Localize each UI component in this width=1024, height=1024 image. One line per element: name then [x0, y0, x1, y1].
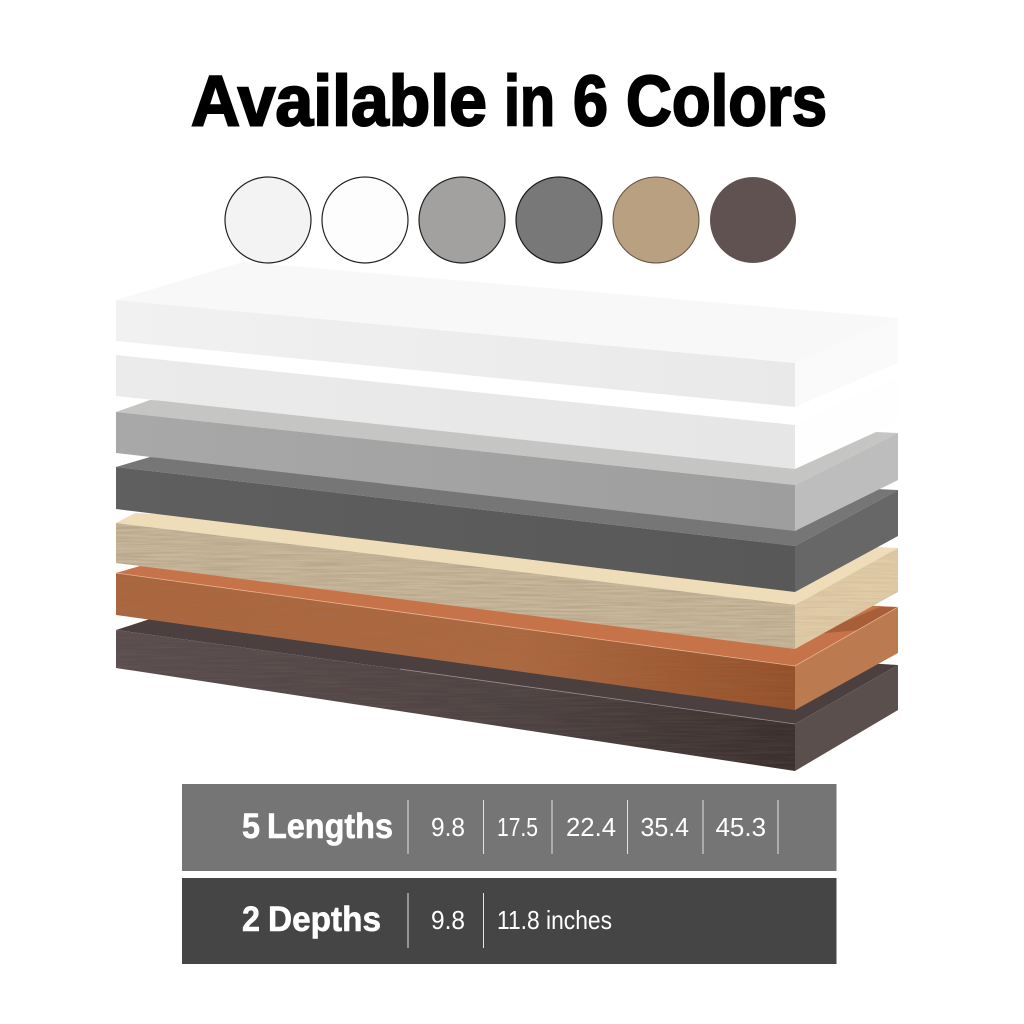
row heading: Lengths [267, 807, 393, 846]
shelf: dark brown [116, 619, 898, 775]
row heading: 5 [242, 807, 260, 846]
title: Colors [626, 62, 827, 142]
swatch: off white [225, 177, 311, 263]
length values: 35.4 [640, 812, 689, 842]
row heading: 2 [242, 900, 260, 939]
row heading: Depths [268, 900, 381, 939]
depth values: 9.8 [431, 905, 465, 935]
shelf: natural oak [116, 513, 900, 655]
shelf: dark gray [116, 457, 898, 592]
table row: lengths [182, 784, 836, 871]
colour swatches [225, 177, 796, 263]
length values [431, 812, 766, 842]
depth values [431, 905, 612, 935]
length values: 22.4 [566, 812, 616, 842]
swatch: white [322, 177, 408, 263]
shelf: white [116, 340, 898, 469]
shelf: off white [116, 262, 898, 407]
title: in [504, 62, 555, 142]
row background [182, 878, 836, 964]
stack of shelves [116, 262, 900, 775]
title: 6 [573, 62, 608, 142]
swatch: dark brown [710, 177, 796, 263]
length values: 17.5 [497, 812, 538, 842]
swatch: light gray [419, 177, 505, 263]
length values: 45.3 [716, 812, 766, 842]
shelf: walnut brown [116, 565, 898, 715]
title: Available [191, 62, 487, 142]
infographic canvas [116, 72, 898, 964]
shelf: light gray [116, 400, 898, 531]
table row: depths [182, 878, 836, 964]
depth values: 11.8 inches [497, 905, 612, 935]
length values: 9.8 [431, 812, 465, 842]
title [191, 62, 827, 142]
swatch: dark gray [516, 177, 602, 263]
swatch: oak [613, 177, 699, 263]
row background [182, 784, 836, 871]
